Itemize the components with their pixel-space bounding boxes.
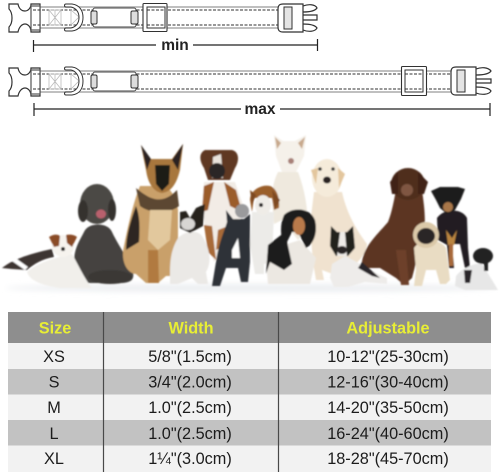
table size column: XL [44,450,64,468]
table width column: 1.0"(2.5cm) [148,399,232,417]
dog: jack russell [2,235,92,288]
label: max: max [244,101,276,118]
dog: pug [413,222,450,286]
dog: miniature pinscher [431,187,470,268]
dog: cavalier spaniel [266,210,316,284]
measure: min [34,37,318,54]
table width column: 1¼"(3.0cm) [148,450,232,468]
cross stitch patches [49,74,79,89]
table adjustable column: 18-28"(45-70cm) [327,450,449,468]
table header labels: Width [168,320,214,338]
label: min: min [161,37,189,54]
table header labels: Size [39,320,71,338]
table width column: 3/4"(2.0cm) [148,374,232,392]
photo: group of dogs [2,135,498,292]
table size column: L [49,425,59,443]
right side-release buckle [278,4,317,32]
dog: white french bulldog [170,204,209,284]
table adjustable column [327,348,449,468]
table header labels: Adjustable [346,320,430,338]
dog: boston terrier [330,226,387,287]
size table [8,312,491,472]
measure: max [34,101,490,118]
dog: golden retriever [310,159,367,280]
table rows [8,343,491,472]
table header labels [39,320,430,338]
table width column [148,348,232,468]
left side-release buckle [9,68,47,96]
keeper loop [91,8,138,27]
table adjustable column: 12-16"(30-40cm) [327,374,449,392]
table size column: M [47,399,61,417]
right side-release buckle [451,67,491,95]
collar strap [33,7,281,28]
table width column: 5/8"(1.5cm) [148,348,232,366]
dog: poodle [74,184,133,284]
keeper loop [91,72,138,91]
D-ring [64,4,83,31]
diagram: collar at maximum length [9,66,491,96]
table width column: 1.0"(2.5cm) [148,425,232,443]
table adjustable column: 16-24"(40-60cm) [327,425,449,443]
dog: german shepherd [123,144,183,283]
floor shadow [5,284,495,292]
cross stitch patches [49,10,79,25]
D-ring [64,67,83,95]
dog: small black and white dog [455,248,498,290]
table size column: XS [43,348,65,366]
dog: beagle [250,186,280,274]
table adjustable column: 10-12"(25-30cm) [327,348,449,366]
dog: black french bulldog [212,204,250,286]
collar strap [33,71,458,92]
table size column: S [49,374,60,392]
dog: white husky [272,135,308,240]
dog: boxer [200,150,243,262]
diagram: collar at minimum length [9,4,317,32]
left side-release buckle [9,4,47,32]
dog: chocolate labrador [362,168,428,285]
slide adjuster [402,66,426,96]
table size column [43,348,65,468]
slide adjuster [143,4,167,32]
table header [8,312,491,343]
table adjustable column: 14-20"(35-50cm) [327,399,449,417]
